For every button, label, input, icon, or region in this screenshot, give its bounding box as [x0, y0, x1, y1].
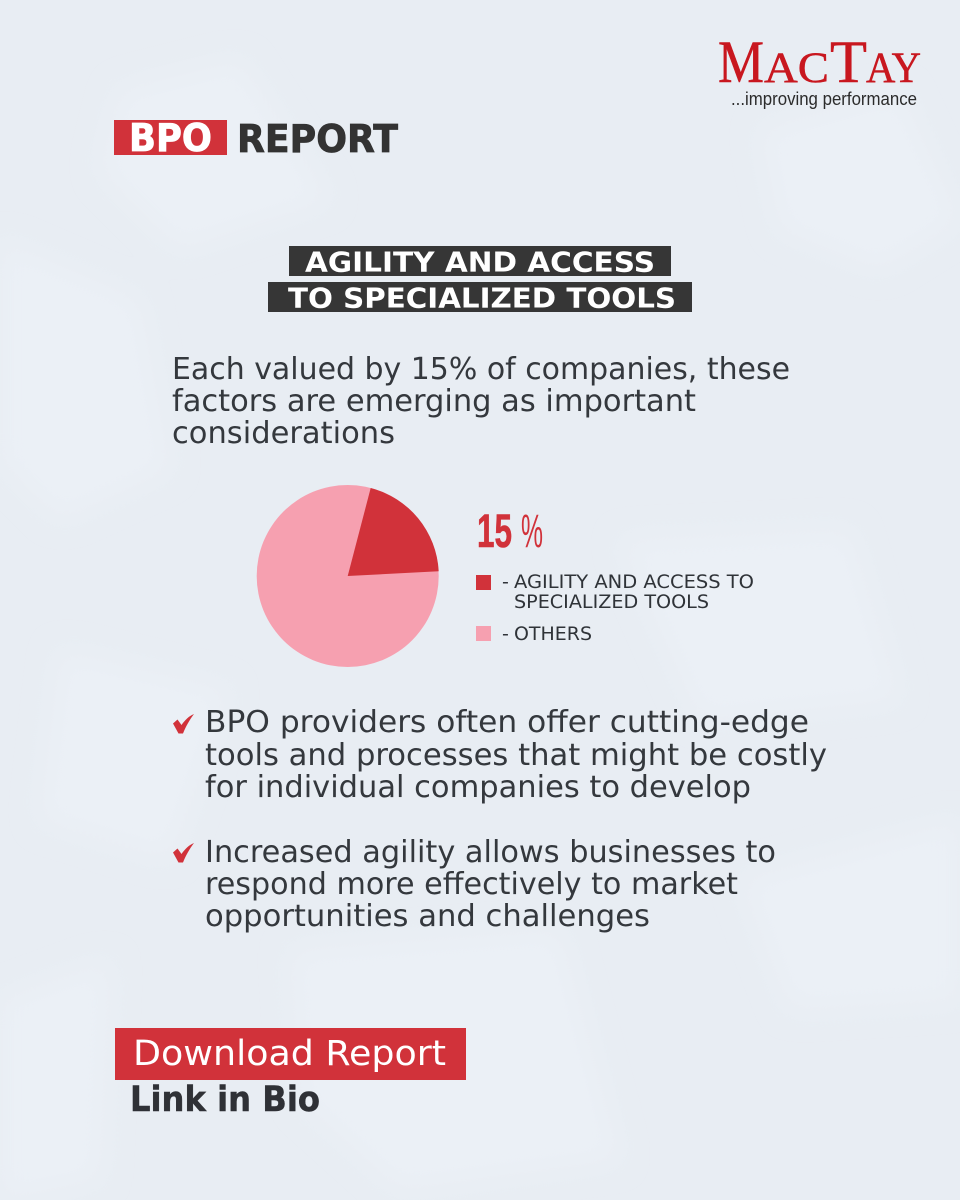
call to action: Download Report: Download Report [133, 1034, 446, 1074]
stat: 15 percent: 15 [477, 504, 512, 557]
call to action: Download Report [115, 1028, 466, 1080]
bullet: Increased agility [173, 835, 776, 934]
title: Agility and access to specialized tools: TO SPECIALIZED TOOLS [288, 282, 676, 314]
legend [476, 571, 754, 645]
bullet: Increased agility: Increased agility allows businesses to [205, 835, 776, 870]
heading: BPO Report: REPORT [237, 117, 398, 161]
intro paragraph: factors are emerging as important [172, 384, 696, 419]
logo: MacTay: T [830, 29, 867, 95]
logo: MacTay: ...improving performance [731, 89, 917, 109]
heading: BPO Report [114, 116, 398, 161]
title: Agility and access to specialized tools: AGILITY AND ACCESS [305, 246, 655, 278]
link in bio: Link in Bio [130, 1080, 320, 1120]
pie chart: 15 percent share [257, 485, 439, 667]
logo: MacTay [718, 29, 921, 109]
bullet: BPO providers: tools and processes that might be costly [205, 738, 827, 773]
legend: - [502, 623, 509, 645]
legend: AGILITY AND ACCESS TO [514, 571, 754, 593]
legend: OTHERS [514, 623, 592, 645]
intro paragraph [172, 352, 790, 451]
logo: MacTay: M [718, 29, 764, 95]
bullet: BPO providers: BPO providers often offer cutting-edge [205, 705, 809, 740]
heading: BPO Report: BPO [129, 116, 212, 160]
bullet: Increased agility: opportunities and challenges [205, 899, 650, 934]
stat: 15 percent: % [521, 504, 543, 557]
bullet: BPO providers [173, 705, 827, 805]
legend: SPECIALIZED TOOLS [514, 591, 709, 613]
legend: - [502, 571, 509, 593]
logo: MacTay: AC [764, 45, 829, 92]
intro paragraph: Each valued by 15% of companies, these [172, 352, 790, 387]
logo: MacTay: AY [866, 45, 921, 92]
bullet: BPO providers: for individual companies to develop [205, 770, 751, 805]
intro paragraph: considerations [172, 416, 395, 451]
bullet: Increased agility: respond more effectively to market [205, 867, 738, 902]
title: Agility and access to specialized tools [268, 246, 692, 314]
